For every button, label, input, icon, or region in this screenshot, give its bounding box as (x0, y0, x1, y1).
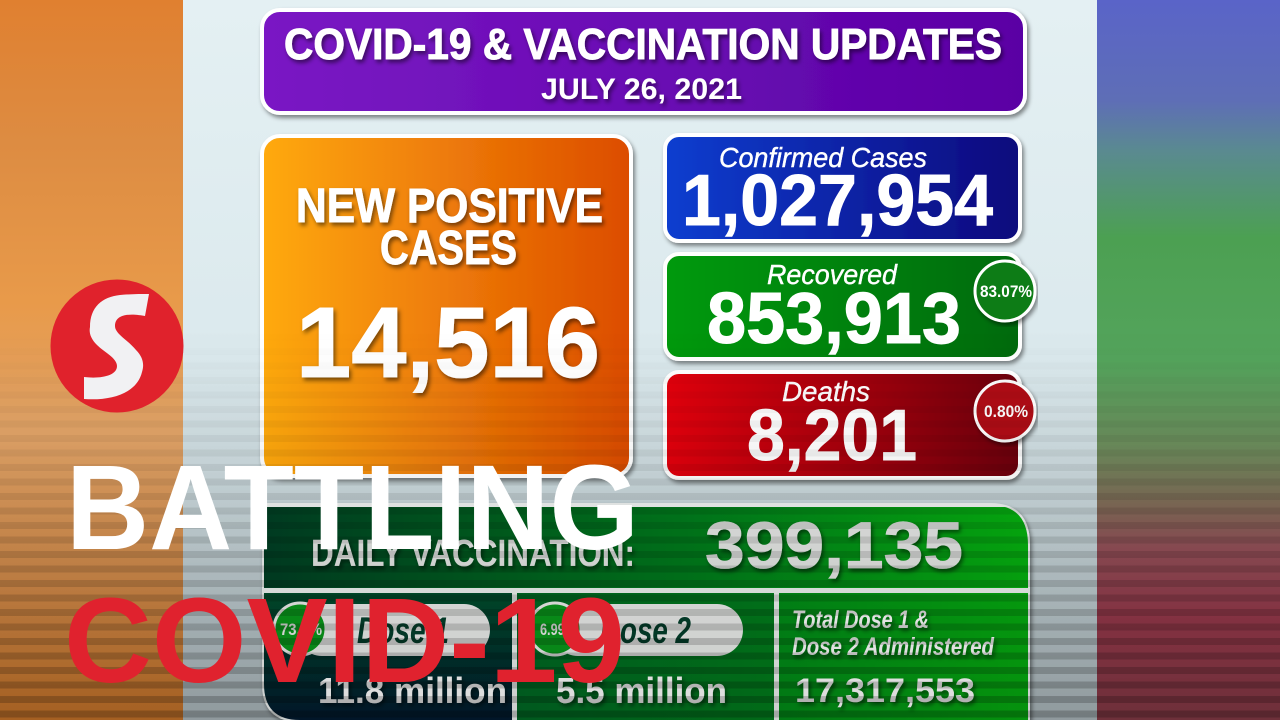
dose 2 block: 5.5 million (556, 670, 727, 711)
panel: daily vaccination (264, 505, 1028, 720)
number: recovered: 853,913 (707, 279, 961, 359)
headline: covid-19: COVID-19 (64, 572, 625, 708)
title: COVID-19 & VACCINATION UPDATES (284, 20, 1002, 69)
dose 1 block: 11.8 million (318, 670, 507, 711)
badge: deaths percent: 0.80% (984, 402, 1028, 421)
headline: battling: BATTLING (66, 439, 639, 575)
dose 2 block (529, 603, 743, 711)
total doses block: Dose 2 Administered (792, 633, 995, 661)
dose 2 block: 6.99% (540, 620, 576, 639)
badge: deaths percent (975, 381, 1035, 441)
right side band (1097, 0, 1280, 720)
label: daily vaccination: DAILY VACCINATION: (311, 533, 635, 575)
label: confirmed cases: Confirmed Cases (719, 142, 927, 173)
total doses block: Total Dose 1 & (792, 606, 929, 634)
panel: confirmed cases (665, 135, 1020, 241)
total doses block: 17,317,553 (795, 672, 975, 710)
dose 2 block: Dose 2 (600, 610, 691, 651)
number: confirmed cases: 1,027,954 (682, 161, 993, 241)
icon: S logo (50, 280, 184, 412)
badge: recovered percent (975, 261, 1035, 321)
heading: new positive cases (296, 180, 603, 275)
title banner (262, 10, 1025, 113)
number: new positive cases: 14,516 (296, 287, 600, 399)
number: daily vaccination: 399,135 (705, 508, 963, 582)
dose 1 block: 73.1% (280, 620, 322, 639)
dose 1 block: Dose 1 (357, 610, 449, 651)
label: recovered: Recovered (767, 259, 898, 290)
label: deaths: Deaths (782, 376, 870, 407)
total doses block (792, 606, 995, 710)
left side band (0, 0, 183, 720)
panel: recovered (665, 254, 1035, 359)
number: deaths: 8,201 (747, 396, 917, 476)
dose 1 block (274, 603, 507, 711)
heading: new positive cases: CASES (380, 222, 517, 275)
panel: deaths (665, 372, 1035, 478)
heading: new positive cases: NEW POSITIVE (296, 180, 603, 233)
date: JULY 26, 2021 (541, 73, 742, 106)
panel: new positive cases (262, 136, 631, 476)
central background (183, 0, 1097, 720)
badge: recovered percent: 83.07% (980, 282, 1032, 301)
